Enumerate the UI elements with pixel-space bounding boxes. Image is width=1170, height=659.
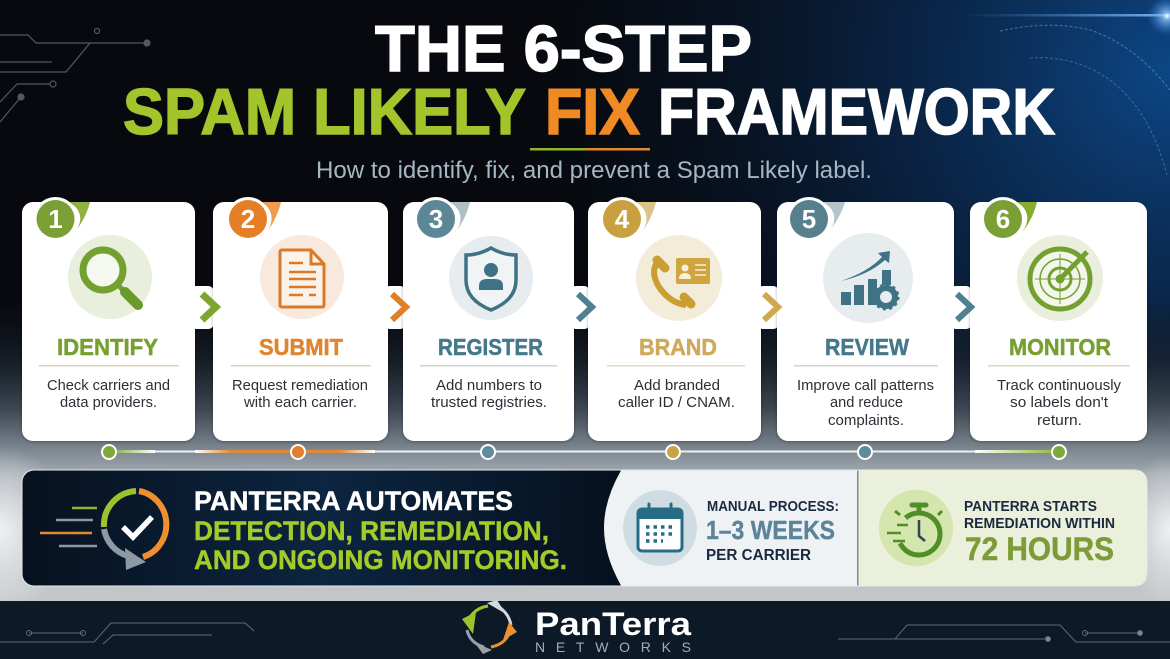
badge 6	[981, 197, 1037, 241]
badge 4	[600, 197, 656, 241]
icon: radar target	[1017, 235, 1103, 321]
description 1: data providers.	[60, 395, 157, 411]
footer bar	[0, 601, 1170, 659]
banner headline	[194, 486, 567, 575]
panterra speed text: PANTERRA STARTS	[964, 498, 1097, 515]
arrow: step 2 to 3	[392, 294, 406, 320]
description 3: trusted registries.	[431, 395, 547, 411]
logo wordmark: PanTerra	[535, 606, 691, 642]
description 1	[47, 378, 170, 411]
icon: rising bar chart with gear	[823, 233, 913, 323]
icon: document	[260, 235, 344, 319]
panel: step 3 register	[403, 197, 590, 441]
icon: speed cycle with check	[40, 491, 166, 570]
manual process text	[706, 498, 839, 564]
title underline	[530, 148, 650, 150]
icon: shield with person	[449, 236, 533, 320]
arrow: step 4 to 5	[764, 294, 778, 320]
panterra speed text: 72 HOURS	[965, 531, 1114, 567]
description 2: Request remediation	[232, 378, 368, 394]
heading: submit: SUBMIT	[259, 334, 343, 360]
panel: step 5 review	[777, 197, 972, 441]
title line 1: THE 6-STEP	[375, 12, 752, 85]
badge 3: 3	[429, 204, 443, 234]
badge 3	[414, 197, 470, 241]
manual process text: MANUAL PROCESS:	[707, 498, 839, 515]
description 5: complaints.	[828, 413, 904, 429]
connector tab 5	[950, 286, 972, 329]
logo subline: NETWORKS	[535, 639, 691, 655]
panterra speed text	[964, 498, 1115, 567]
panel: step 1 identify	[22, 197, 214, 441]
description 6: return.	[1037, 413, 1082, 429]
connector tab 4	[757, 286, 779, 329]
description 2: with each carrier.	[243, 395, 357, 411]
icon: stopwatch	[879, 490, 953, 566]
heading: review: REVIEW	[825, 334, 909, 360]
description 6: so labels don't	[1010, 395, 1108, 411]
panterra speed text: REMEDIATION WITHIN	[964, 515, 1115, 532]
panel: panterra speed	[857, 470, 1146, 586]
logo	[462, 600, 691, 655]
connector tab 1	[190, 286, 214, 329]
description 5: Improve call patterns	[797, 378, 934, 394]
panel: manual process	[604, 470, 858, 586]
badge 5	[787, 197, 845, 241]
banner headline: PANTERRA AUTOMATES	[194, 486, 513, 516]
heading: brand: BRAND	[639, 334, 717, 360]
description 6: Track continuously	[997, 378, 1122, 394]
badge 1: 1	[48, 204, 63, 234]
timeline	[102, 445, 1066, 459]
title line 2: framework: FRAMEWORK	[658, 75, 1055, 148]
description 1: Check carriers and	[47, 378, 170, 394]
arrow: step 5 to 6	[957, 294, 971, 320]
manual process text: 1–3 WEEKS	[706, 515, 835, 545]
panel: step 4 brand	[588, 197, 779, 441]
panel: step 6 monitor	[970, 197, 1147, 441]
icon: calendar	[623, 490, 697, 566]
badge 1	[34, 197, 90, 241]
badge 4: 4	[615, 204, 630, 234]
description 3	[431, 378, 547, 411]
heading: monitor: MONITOR	[1009, 334, 1111, 360]
decoration: top right flare and arcs	[960, 0, 1170, 175]
title line 2: fix: FIX	[545, 75, 640, 148]
description 4: Add branded	[634, 378, 720, 394]
heading: identify: IDENTIFY	[57, 334, 158, 360]
logo mark	[462, 600, 517, 654]
description 2	[232, 378, 368, 411]
panel: step 2 submit	[213, 197, 406, 441]
subtitle: How to identify, fix, and prevent a Spam Likely label.	[316, 157, 872, 184]
connector tab 3	[570, 286, 590, 329]
badge 2: 2	[241, 204, 255, 234]
connector tab 2	[384, 286, 406, 329]
decoration: top left circuit lines	[0, 28, 150, 122]
badge 6: 6	[996, 204, 1010, 234]
icon: magnifying glass	[68, 235, 152, 319]
description 6	[997, 378, 1122, 429]
arrow: step 3 to 4	[578, 294, 592, 320]
manual process text: PER CARRIER	[706, 547, 811, 564]
banner headline: DETECTION, REMEDIATION,	[194, 516, 549, 546]
heading: register: REGISTER	[438, 334, 543, 360]
description 4	[618, 378, 735, 411]
description 3: Add numbers to	[436, 378, 542, 394]
panel: automation banner	[22, 470, 1147, 586]
title	[123, 12, 1055, 148]
description 5	[797, 378, 934, 429]
icon: phone and caller id card	[636, 235, 722, 321]
title line 2: spam likely: SPAM LIKELY	[123, 75, 526, 148]
banner headline: AND ONGOING MONITORING.	[194, 545, 567, 575]
description 4: caller ID / CNAM.	[618, 395, 735, 411]
description 5: and reduce	[830, 395, 903, 411]
badge 2	[226, 197, 281, 241]
badge 5: 5	[802, 204, 816, 234]
arrow: step 1 to 2	[202, 294, 216, 320]
decoration: footer circuit lines	[0, 623, 1170, 644]
